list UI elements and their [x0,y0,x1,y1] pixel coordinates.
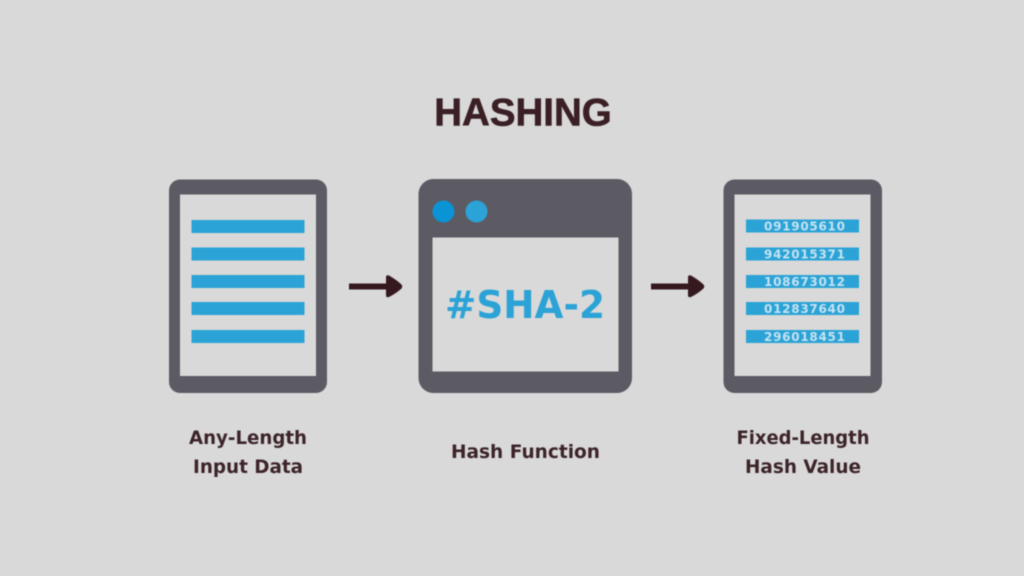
icon: window dot one [432,200,454,222]
label: fixed-length hash value: Fixed-Length [736,427,870,449]
hash value rows: 108673012 [764,275,845,289]
panel: input document [169,180,327,393]
arrow: input to hash function [349,275,402,297]
hash value rows: 012837640 [764,302,845,316]
label: any-length input data: Any-Length [189,427,307,449]
algorithm name: #SHA-2 [445,283,605,327]
label: fixed-length hash value [736,427,870,478]
hash value rows: 296018451 [764,330,845,344]
panel: output document [724,180,882,393]
hash value rows: 091905610 [764,220,845,234]
panel: hash function window [418,179,632,393]
hash value rows: 942015371 [764,248,845,262]
label: any-length input data: Input Data [193,456,303,478]
title: HASHING [434,92,612,134]
icon: window dot two [466,200,488,222]
input data lines [192,220,304,343]
label: any-length input data [189,427,307,478]
arrow: hash function to hash value [651,275,704,297]
label: hash function: Hash Function [451,441,600,463]
label: fixed-length hash value: Hash Value [745,456,861,478]
hash value rows [746,220,859,344]
